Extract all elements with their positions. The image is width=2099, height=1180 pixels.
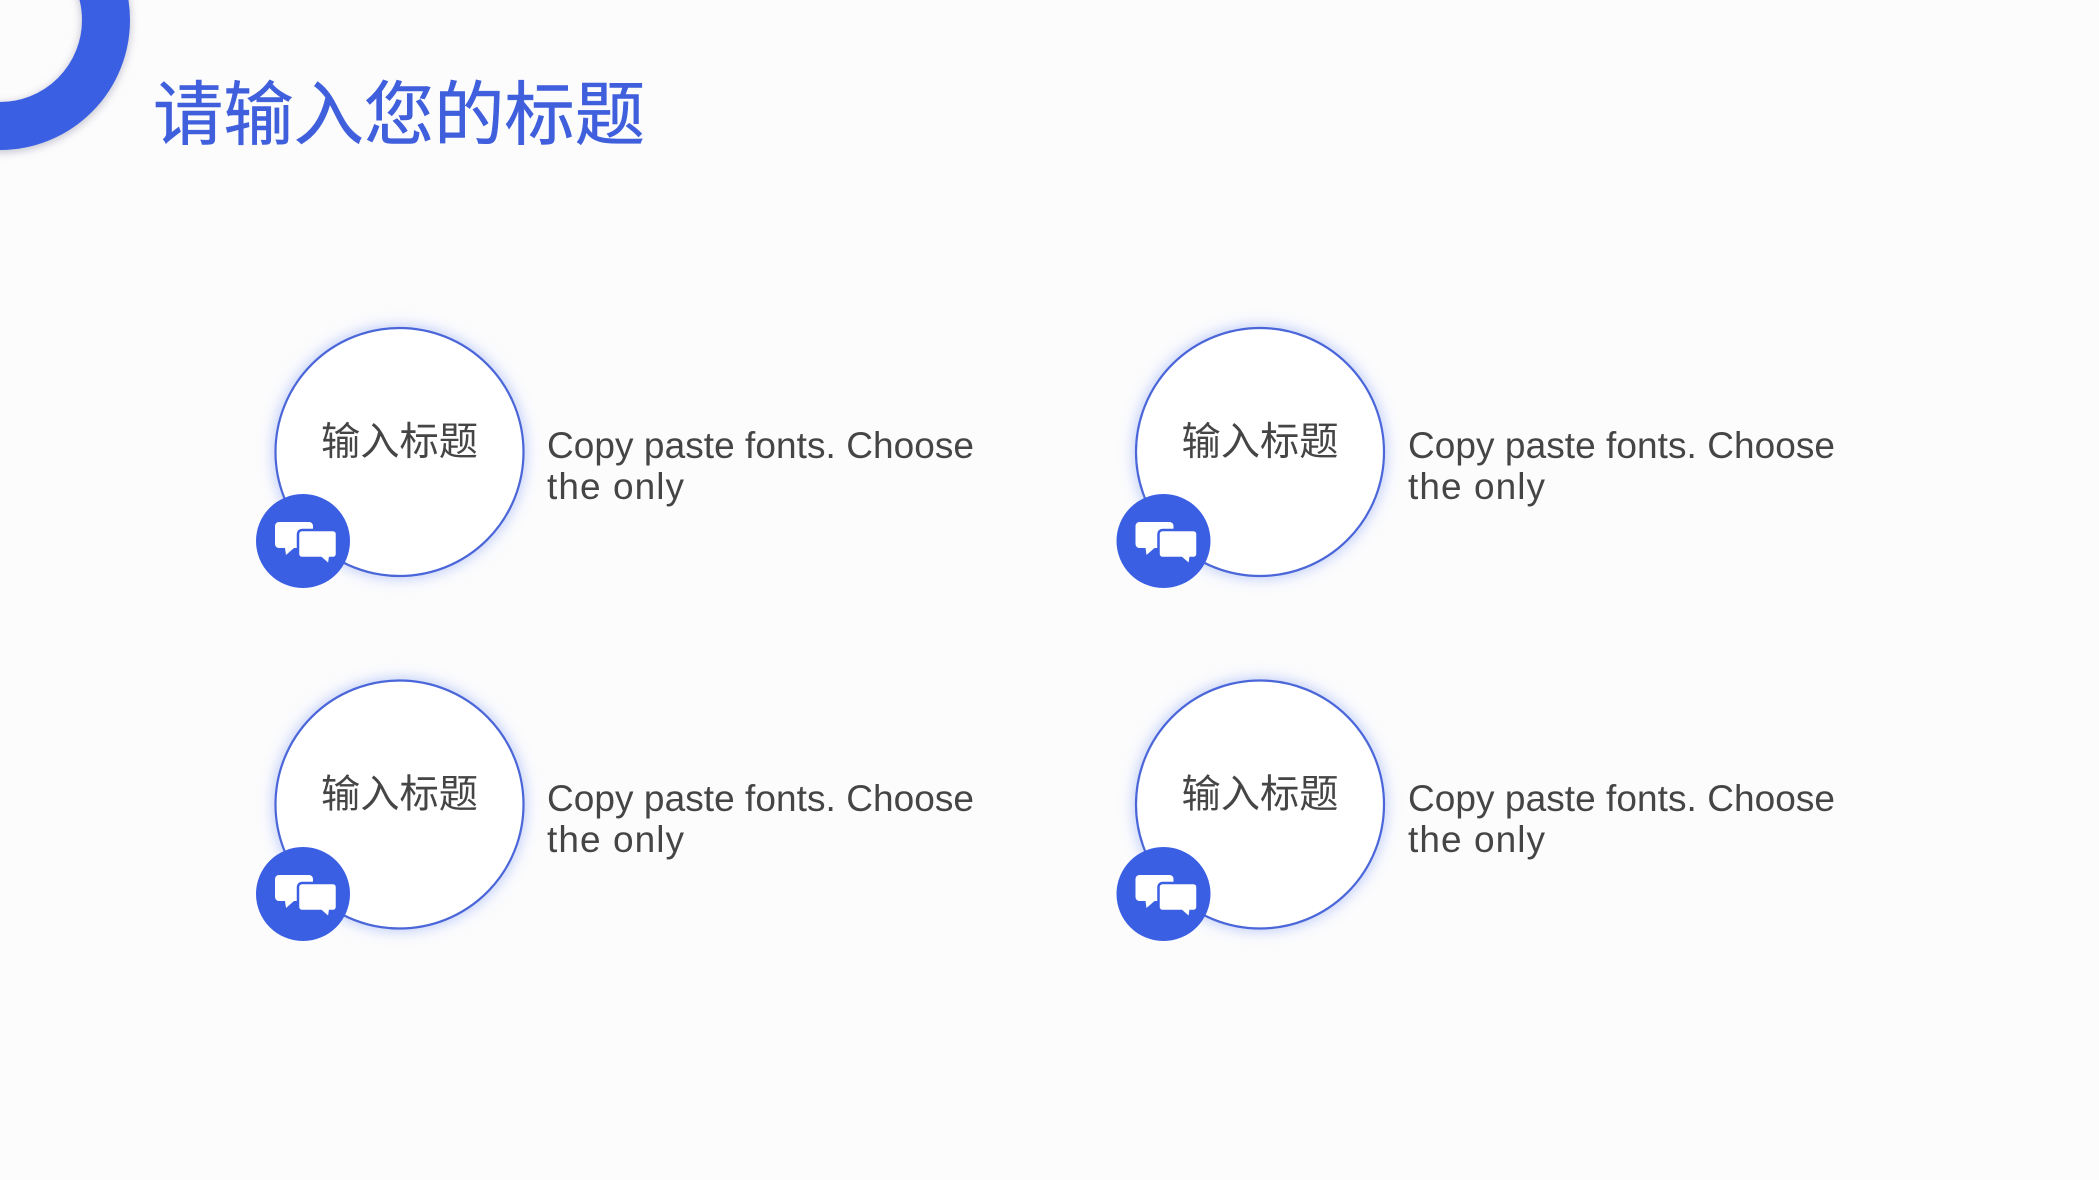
circle: item 3 <box>273 678 526 931</box>
icon: chat bubbles item 1 <box>256 494 350 588</box>
text block: item 1: Copy paste fonts. Choose <box>547 425 974 466</box>
heading: item 3: 输入标题 <box>321 774 478 816</box>
panel: item 4 bottom right <box>1116 678 1835 941</box>
panel: item 1 top left <box>256 326 974 588</box>
text block: item 1: the only <box>547 466 684 507</box>
panel: item 3 bottom left <box>256 678 974 941</box>
text block: item 4: Copy paste fonts. Choose <box>1408 778 1835 819</box>
text block: item 2: Copy paste fonts. Choose <box>1408 425 1835 466</box>
text block: item 3: the only <box>547 819 684 860</box>
icon: chat bubbles item 3 <box>256 847 350 941</box>
circle: item 1 <box>273 326 526 578</box>
circle: item 2 <box>1134 326 1386 578</box>
text block: item 4: the only <box>1408 819 1546 860</box>
heading: item 2: 输入标题 <box>1182 421 1338 464</box>
heading: item 4: 输入标题 <box>1182 774 1338 816</box>
icon: chat bubbles item 2 <box>1116 494 1210 588</box>
circle: item 4 <box>1134 678 1386 931</box>
icon: chat bubbles item 4 <box>1116 847 1210 941</box>
decorative ring: top-left corner <box>0 0 106 128</box>
title: 请输入您的标题 <box>153 76 645 154</box>
panel: item 2 top right <box>1116 326 1835 588</box>
text block: item 3: Copy paste fonts. Choose <box>547 778 974 819</box>
text block: item 2: the only <box>1408 466 1546 507</box>
heading: item 1: 输入标题 <box>321 421 478 464</box>
